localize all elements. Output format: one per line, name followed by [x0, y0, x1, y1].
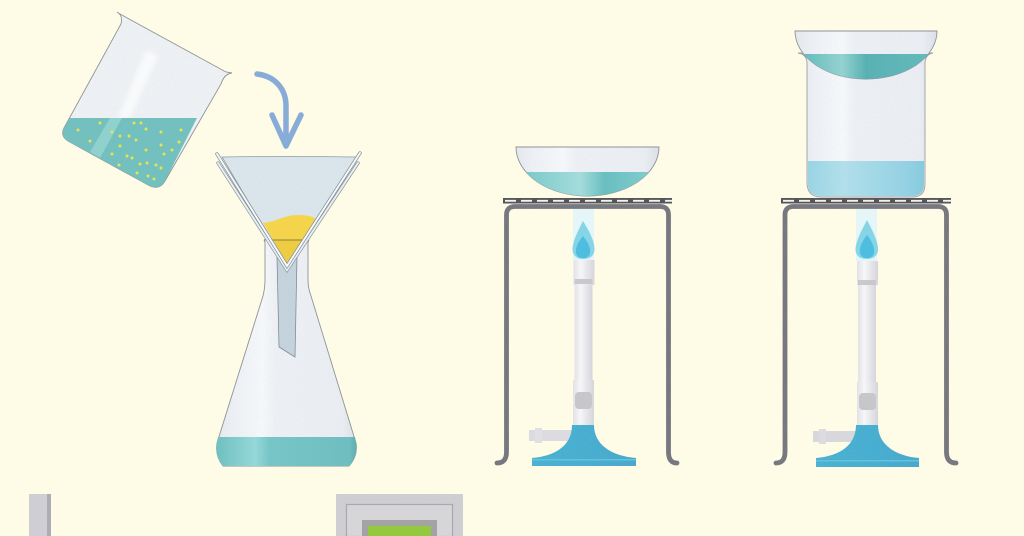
liquid highlight	[90, 118, 122, 158]
yellow particles	[76, 122, 182, 180]
cropped grey block, bottom left	[29, 494, 51, 536]
funnel double walls	[217, 153, 360, 270]
liquid level darker residue	[273, 240, 304, 263]
flame 2	[856, 220, 878, 259]
flask rim line over funnel	[264, 239, 308, 241]
burner glow 2	[856, 209, 877, 261]
beaker liquid	[63, 118, 197, 187]
funnel with filter paper and residue	[217, 153, 360, 270]
flask filtrate liquid	[216, 437, 356, 466]
flask glass body	[217, 239, 356, 466]
yellow residue	[263, 215, 316, 263]
wire gauze 1	[503, 198, 672, 204]
conical flask with filtrate	[216, 239, 356, 466]
funnel cone	[222, 156, 358, 267]
cropped apparatus with green window, bottom centre	[336, 494, 463, 536]
bunsen setup 1	[497, 147, 677, 466]
beaker glass body	[63, 12, 232, 187]
flame 1	[572, 221, 595, 259]
wire gauze 2	[781, 198, 951, 204]
glass highlight	[120, 52, 156, 118]
tripod 2	[776, 206, 956, 463]
bunsen burner 1	[529, 260, 636, 466]
evaporating dish 2	[795, 31, 937, 80]
funnel stem	[277, 256, 297, 357]
arrow: pour into funnel	[257, 74, 301, 146]
green window	[368, 526, 431, 536]
collecting beaker	[798, 53, 933, 197]
bunsen burner 2	[813, 261, 919, 467]
evaporating dish 1	[516, 147, 659, 197]
burner glow 1	[573, 209, 594, 260]
bunsen setup 2	[776, 31, 956, 467]
tilted beaker with suspension	[63, 12, 232, 187]
tripod 1	[497, 206, 677, 463]
